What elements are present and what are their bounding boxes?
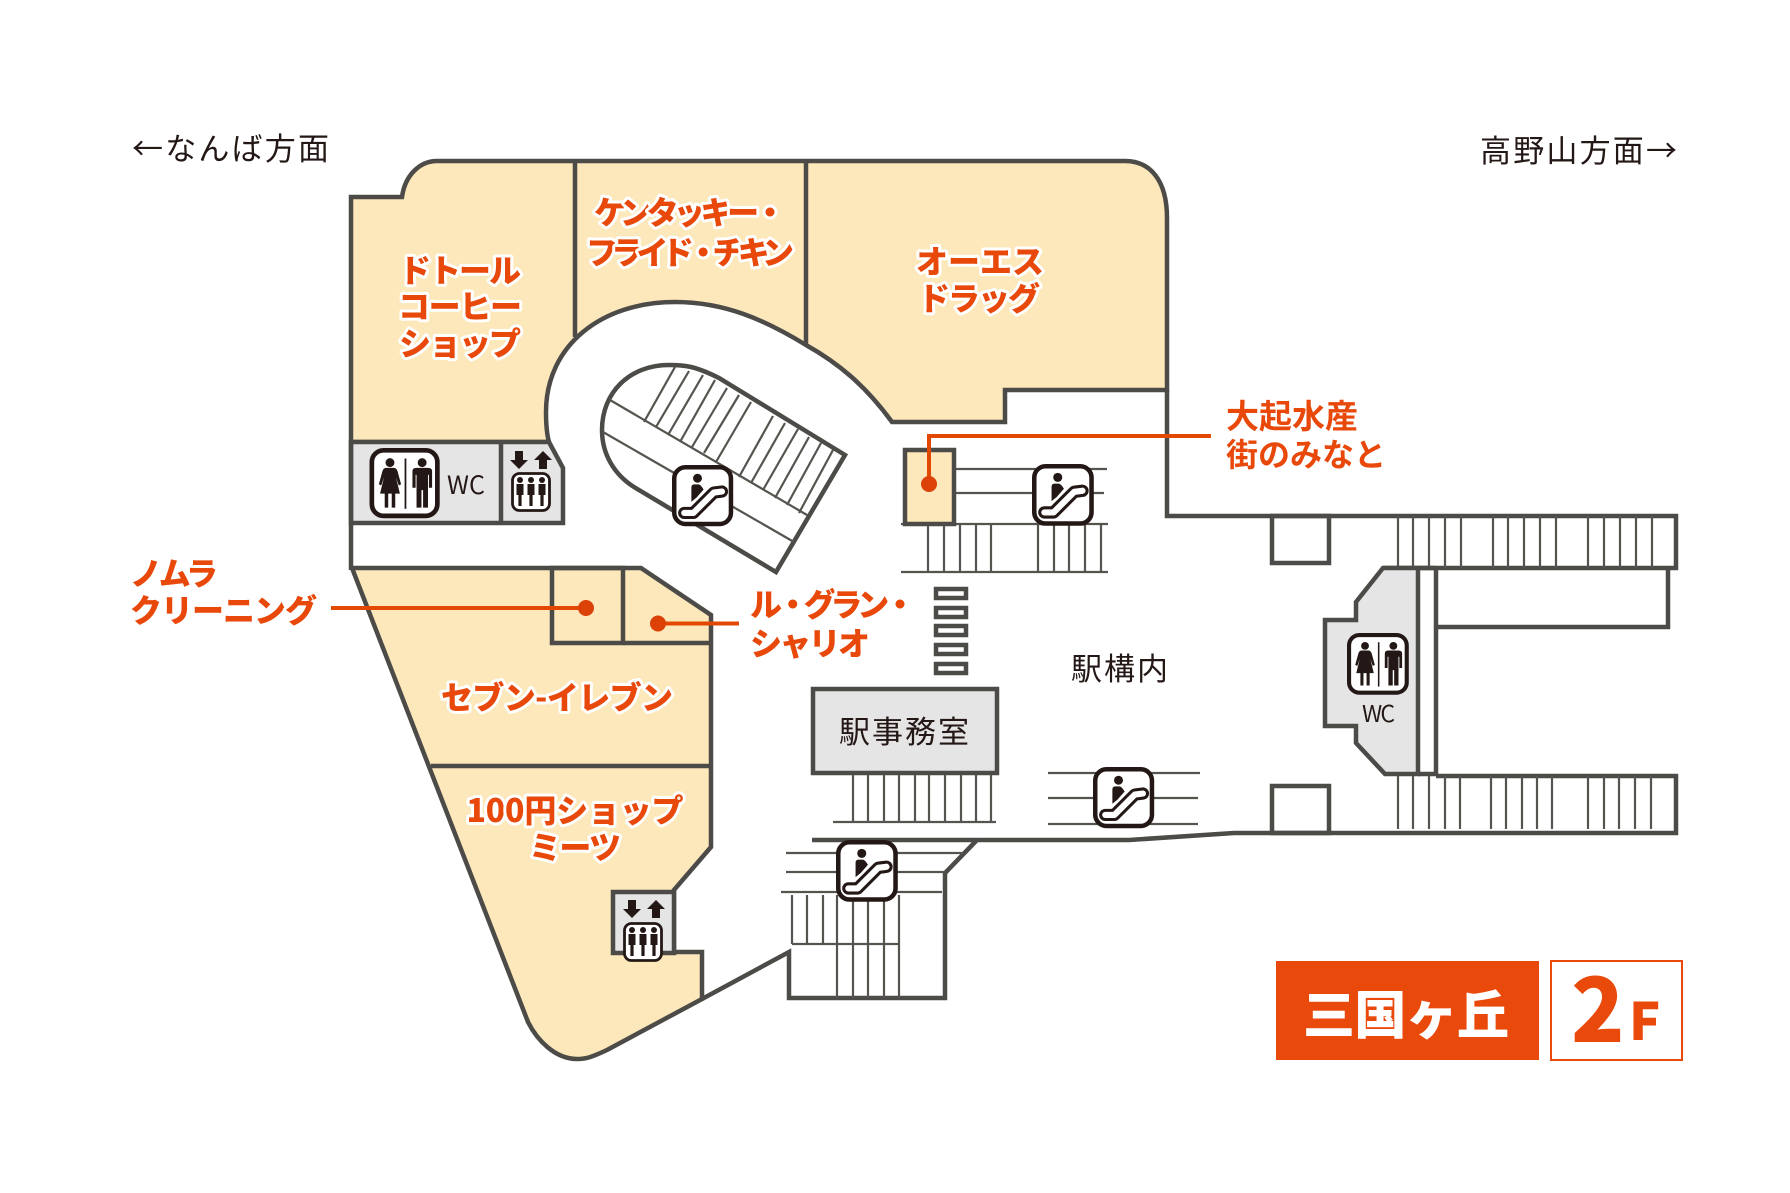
callout: Le Grand Chariot bbox=[650, 580, 916, 665]
marker: vertical bars bbox=[936, 589, 966, 673]
panel: right WC room bbox=[1325, 568, 1418, 774]
callout: Nomura Cleaning bbox=[130, 549, 594, 632]
label: WC: WC bbox=[447, 466, 485, 502]
label: 7-Eleven: セブン-イレブン bbox=[441, 673, 673, 719]
icon: elevator arrows bbox=[510, 451, 552, 469]
escalator: central curved stairs bbox=[602, 365, 845, 572]
icon: escalator bbox=[674, 467, 731, 524]
label: inside station: 駅構内 bbox=[1071, 644, 1168, 689]
label: 100 Yen Shop Meets: ミーツ bbox=[529, 823, 621, 869]
icon: elevator arrows bbox=[623, 900, 665, 918]
room: Le Grand Chariot bbox=[623, 641, 711, 645]
divider: 7-Eleven / Meets bbox=[431, 764, 711, 768]
icon: elevator bbox=[624, 924, 662, 960]
icon: escalator bbox=[838, 842, 896, 900]
label: Doutor Coffee Shop: コーヒー bbox=[398, 282, 522, 328]
floor badge: 2 bbox=[1571, 941, 1625, 1068]
label: Doutor Coffee Shop bbox=[398, 246, 522, 365]
icon: elevator bbox=[512, 474, 550, 510]
escalator: beside Daiki Suisan bbox=[901, 466, 1108, 572]
label: OS Drug: オーエス bbox=[916, 237, 1044, 283]
divider: KFC / OS Drug bbox=[804, 161, 808, 345]
floor badge: F bbox=[1629, 980, 1660, 1055]
callout: Daiki Suisan bbox=[921, 390, 1386, 492]
room: Daiki Suisan Machi no Minato bbox=[905, 450, 954, 524]
divider: Doutor / KFC bbox=[573, 161, 577, 337]
label: 100 Yen Shop Meets: 100円ショップ bbox=[466, 786, 684, 832]
wall: right corridor bottom bbox=[812, 776, 1676, 840]
escalator: lower middle bbox=[1048, 769, 1200, 826]
room: Nomura Cleaning bbox=[552, 568, 623, 643]
label: Kentucky Fried Chicken bbox=[586, 188, 794, 274]
label: Doutor Coffee Shop: ショップ bbox=[399, 319, 521, 365]
label: Doutor Coffee Shop: ドトール bbox=[399, 246, 521, 292]
pillar: upper bbox=[1272, 516, 1329, 563]
station name badge bbox=[1276, 961, 1539, 1060]
station name badge: 三国ヶ丘 bbox=[1303, 974, 1509, 1049]
stairs: lower right bbox=[1398, 776, 1651, 829]
panel: lower shops block bbox=[352, 568, 711, 1059]
label: Kentucky Fried Chicken: フライド・チキン bbox=[586, 228, 794, 274]
icon: toilets bbox=[372, 450, 437, 516]
panel: upper shops block bbox=[351, 161, 1167, 442]
pillar: lower bbox=[1272, 786, 1329, 833]
callout: Daiki Suisan: 街のみなと bbox=[1226, 430, 1386, 476]
callout: Daiki Suisan: 大起水産 bbox=[1226, 390, 1358, 438]
panel: station office bbox=[813, 689, 997, 773]
stairs: below station office bbox=[833, 775, 996, 822]
panel: left WC and elevator room bbox=[351, 442, 563, 523]
floor badge bbox=[1551, 941, 1682, 1068]
label: WC: WC bbox=[1362, 695, 1395, 729]
callout: Nomura Cleaning: ノムラ bbox=[130, 549, 218, 595]
wall: left corridor bbox=[349, 442, 353, 570]
icon: toilets bbox=[1349, 635, 1407, 693]
callout: Le Grand Chariot: シャリオ bbox=[750, 619, 870, 665]
label: OS Drug bbox=[916, 237, 1044, 320]
direction label: Koyasan: 高野山方面→ bbox=[1480, 126, 1677, 171]
stairs: upper right bbox=[1398, 516, 1652, 568]
callout: Le Grand Chariot: ル・グラン・ bbox=[750, 580, 916, 626]
elevator room: lower bbox=[613, 892, 674, 960]
direction label: Namba: ←なんば方面 bbox=[132, 124, 329, 169]
callout: Nomura Cleaning: クリーニング bbox=[130, 586, 317, 632]
label: OS Drug: ドラッグ bbox=[918, 274, 1040, 320]
wall: right corridor bbox=[1167, 390, 1676, 568]
label: 100 Yen Shop Meets bbox=[466, 786, 684, 869]
wall: right inner rooms bbox=[1418, 568, 1668, 776]
escalator and stairs: bottom bbox=[702, 840, 977, 999]
icon: escalator bbox=[1034, 466, 1092, 524]
icon: escalator bbox=[1095, 769, 1152, 826]
label: station office: 駅事務室 bbox=[839, 707, 969, 752]
label: Kentucky Fried Chicken: ケンタッキー・ bbox=[594, 188, 786, 234]
